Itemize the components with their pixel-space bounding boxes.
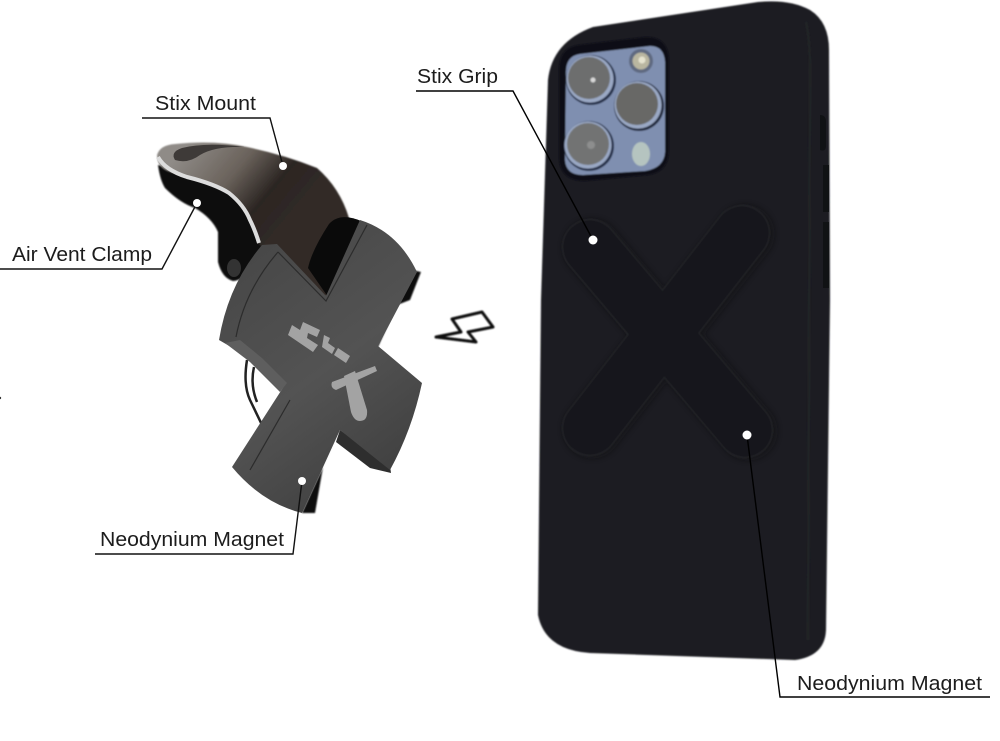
X inset line bbox=[236, 225, 367, 470]
grip X bbox=[590, 233, 745, 430]
rear clip wire bbox=[246, 360, 263, 427]
X bottom shadow bbox=[302, 430, 340, 513]
grip shadow bbox=[592, 234, 748, 431]
stix mount band bbox=[157, 143, 349, 300]
label: Stix Grip: Stix Grip bbox=[417, 66, 498, 88]
side buttons bbox=[820, 115, 829, 288]
phone with grip bbox=[538, 1, 830, 660]
phone case bbox=[538, 1, 830, 660]
label: Neodynium Magnet (grip): Neodynium Magnet bbox=[797, 673, 982, 695]
X left flap bbox=[225, 340, 287, 392]
stray mark at left edge bbox=[0, 397, 1, 399]
band top button bbox=[174, 145, 245, 161]
stix logo bbox=[288, 322, 377, 421]
clamp foot highlight bbox=[227, 259, 241, 277]
label: Neodynium Magnet (grip) bbox=[742, 430, 990, 697]
camera glass bbox=[565, 46, 665, 175]
band silver edge bbox=[158, 157, 259, 243]
lens bottom left bbox=[564, 121, 614, 171]
lens right bbox=[614, 81, 664, 131]
label: Stix Mount bbox=[142, 93, 287, 170]
camera housing bbox=[559, 37, 669, 181]
lens top left bbox=[566, 55, 616, 105]
notch shadow bbox=[308, 217, 361, 297]
X face bbox=[219, 220, 422, 513]
label: Neodynium Magnet (mount): Neodynium Magnet bbox=[100, 529, 284, 551]
label: Air Vent Clamp bbox=[0, 199, 201, 269]
flash bbox=[629, 49, 653, 73]
case side crease bbox=[806, 22, 810, 640]
microphone bbox=[632, 142, 650, 166]
X bottom-right flange bbox=[336, 430, 391, 473]
lightning bolt icon bbox=[436, 312, 493, 342]
label: Neodynium Magnet (mount) bbox=[95, 477, 306, 554]
X right shadow bbox=[370, 270, 421, 347]
camera module bbox=[559, 37, 669, 181]
label: Stix Grip bbox=[416, 66, 598, 244]
air vent clamp bbox=[158, 165, 268, 281]
label: Air Vent Clamp: Air Vent Clamp bbox=[12, 244, 152, 266]
air vent mount bbox=[157, 143, 422, 513]
label: Stix Mount: Stix Mount bbox=[155, 93, 256, 115]
